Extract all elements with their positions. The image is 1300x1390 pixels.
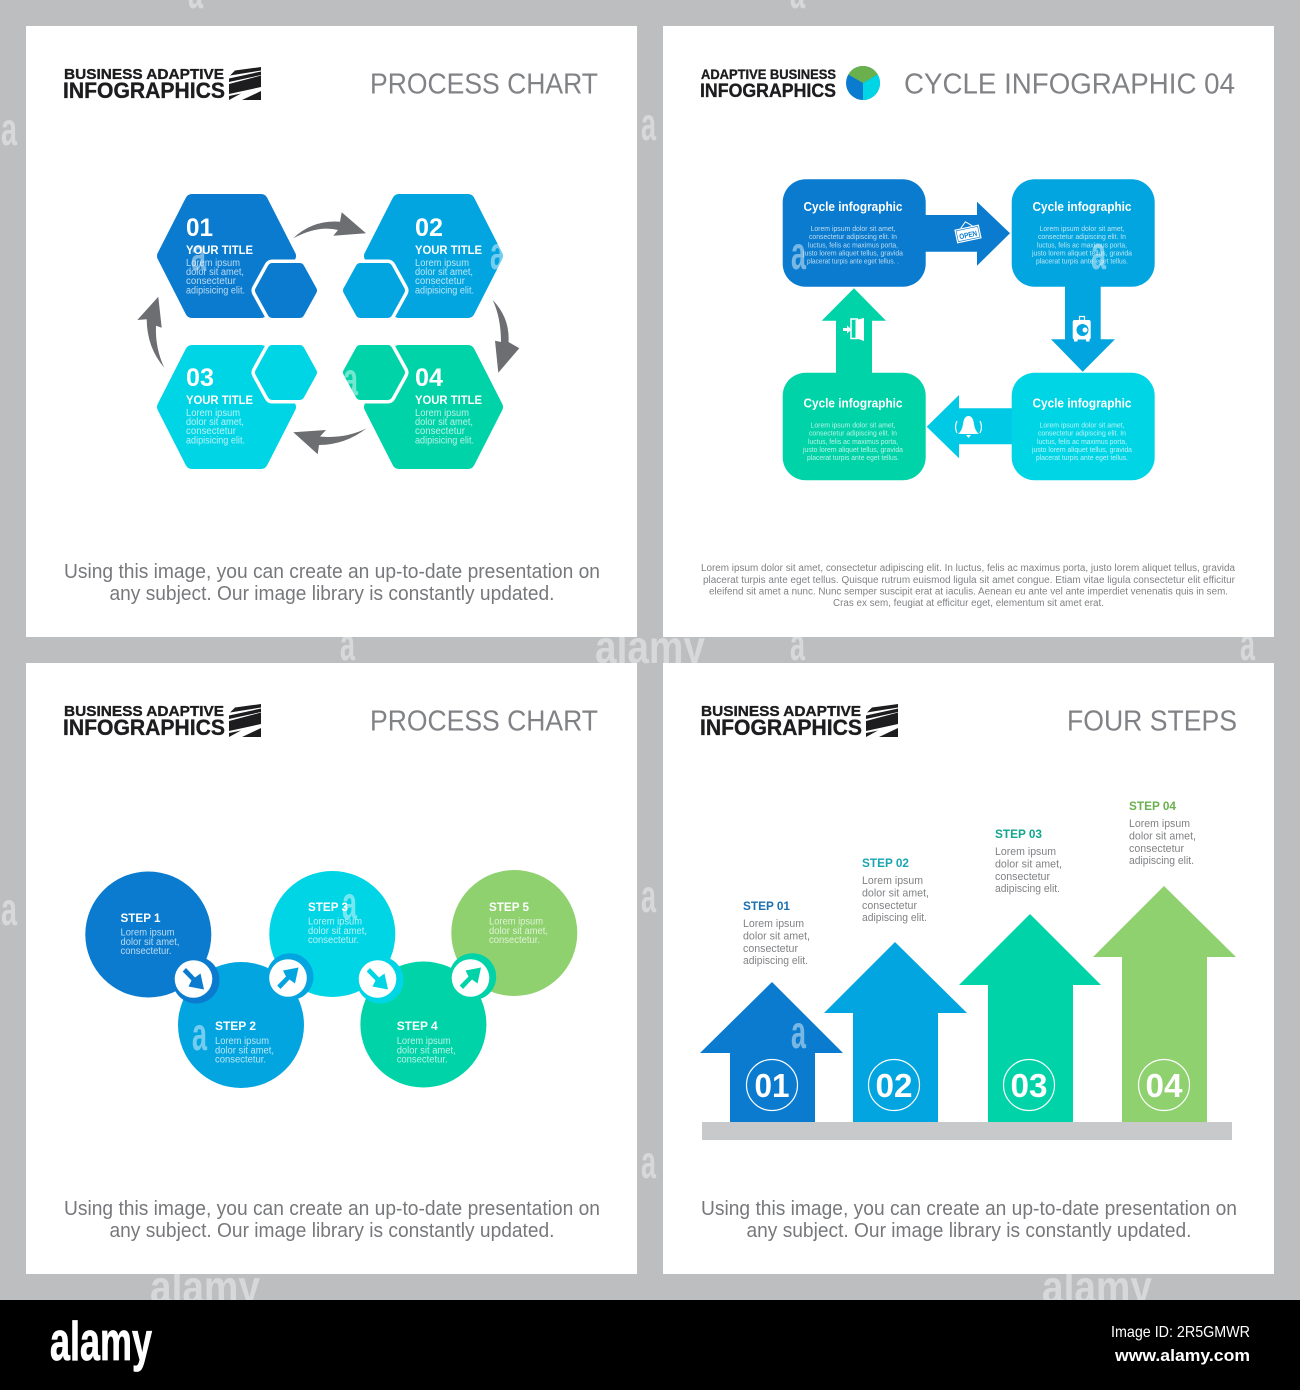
- description: [701, 1198, 1237, 1242]
- description: [701, 563, 1236, 609]
- panel: process chart hexagons: a: [191, 228, 206, 280]
- text: step 02: STEP 02: [862, 856, 909, 870]
- badge: arrow 3 to 4: [356, 956, 404, 1004]
- hexagon 04: YOUR TITLE: [415, 393, 482, 407]
- box: cycle 3: luctus, felis ac maximus porta,: [1037, 437, 1127, 446]
- circle: step 1: Lorem ipsum: [120, 928, 174, 938]
- text: step 04: STEP 04: [1129, 799, 1176, 813]
- hexagon 04: adipisicing elit.: [415, 436, 474, 446]
- text: alamy: [150, 1261, 260, 1313]
- hexagon 03: dolor sit amet,: [186, 417, 244, 428]
- logo: business adaptive infographics: [63, 66, 261, 103]
- panel: four steps: [663, 663, 1274, 1274]
- icon: pie circle: [846, 66, 880, 100]
- hexagon 04: dolor sit amet,: [415, 417, 473, 428]
- description: Using this image, you can create an up-to-date presentation on: [701, 1198, 1237, 1220]
- box: cycle 1: Cycle infographic: [804, 200, 903, 214]
- description: Using this image, you can create an up-to-date presentation on: [64, 1198, 600, 1220]
- hexagon 02: 02: [415, 214, 443, 242]
- logo: adaptive business infographics: INFOGRAPHICS: [700, 81, 836, 102]
- hexagon 01: consectetur: [186, 276, 237, 287]
- hexagon 04: [348, 350, 496, 462]
- box: cycle 2: consectetur adipiscing elit. In: [1038, 232, 1126, 241]
- text: step 02: adipiscing elit.: [862, 912, 927, 924]
- hexagon 02: consectetur: [415, 276, 466, 287]
- circle: step 1: [85, 872, 211, 998]
- footer bar: [0, 1300, 1300, 1390]
- box: cycle 1: consectetur adipiscing elit. In: [809, 232, 897, 241]
- text: step 04: Lorem ipsum: [1129, 818, 1190, 830]
- hexagon 03: 03: [186, 364, 214, 392]
- description: any subject. Our image library is constantly updated.: [110, 1220, 554, 1242]
- circle: step 3: dolor sit amet,: [308, 926, 367, 937]
- panel: process chart hexagons: [26, 26, 637, 637]
- box: cycle 1: Lorem ipsum dolor sit amet,: [810, 224, 896, 233]
- box: cycle 2: Lorem ipsum dolor sit amet,: [1040, 224, 1124, 233]
- hexagon 01: Lorem ipsum: [186, 258, 240, 269]
- box: cycle 4: luctus, felis ac maximus porta,: [808, 437, 898, 446]
- arrow: step 01: 01: [754, 1067, 790, 1104]
- text: a: [1, 103, 17, 155]
- circle: step 2: STEP 2: [215, 1019, 256, 1033]
- circle: step 3: Lorem ipsum: [308, 916, 362, 928]
- footer logo: alamy: [50, 1310, 152, 1372]
- logo: adaptive business infographics: ADAPTIVE BUSINESS: [701, 66, 836, 82]
- box: cycle 4: Cycle infographic: [804, 397, 903, 411]
- logo: business adaptive infographics: [63, 703, 261, 740]
- panel: cycle infographic 04: a: [1091, 227, 1106, 279]
- text: step 03: dolor sit amet,: [995, 858, 1062, 870]
- text: step 01: dolor sit amet,: [743, 930, 810, 942]
- box: cycle 3: Lorem ipsum dolor sit amet,: [1040, 421, 1124, 430]
- text: step 04: dolor sit amet,: [1129, 830, 1196, 842]
- arrow: 01 to 02: [293, 212, 366, 238]
- hexagon 02: adipisicing elit.: [415, 286, 474, 296]
- logo: business adaptive infographics: INFOGRAPHICS: [63, 715, 225, 740]
- arrow: 02 to 04: [493, 300, 519, 373]
- panel: four steps: a: [791, 1006, 806, 1058]
- box: cycle 2: [1012, 179, 1155, 287]
- hexagon 02: YOUR TITLE: [415, 243, 482, 257]
- arrow right with open sign: [924, 202, 1010, 266]
- text: step 03: Lorem ipsum: [995, 846, 1056, 858]
- text: step 03: STEP 03: [995, 827, 1042, 841]
- panel: process chart hexagons: a: [490, 227, 505, 279]
- box: cycle 4: justo lorem aliquet tellus, gravida: [802, 445, 904, 454]
- text: step 02: [862, 856, 929, 924]
- text: a: [1240, 618, 1255, 670]
- logo: business adaptive infographics: INFOGRAPHICS: [63, 78, 225, 103]
- circle: step 2: Lorem ipsum: [215, 1036, 269, 1047]
- box: cycle 3: placerat turpis ante eget tellus.: [1036, 453, 1128, 462]
- box: cycle 4: placerat turpis ante eget tellus.: [807, 453, 899, 462]
- circle: step 2: [178, 962, 304, 1088]
- circle: step 1: STEP 1: [120, 911, 161, 925]
- text: step 02: consectetur: [862, 900, 917, 912]
- text: a: [641, 870, 656, 922]
- box: cycle 4: Lorem ipsum dolor sit amet,: [810, 421, 896, 430]
- hexagon 02: [348, 201, 496, 313]
- arrow: step 03: 03: [1010, 1067, 1048, 1104]
- text: step 01: consectetur: [743, 943, 798, 955]
- heading: FOUR STEPS: [1067, 706, 1237, 738]
- hexagon 03: consectetur: [186, 426, 237, 437]
- circle: step 5: STEP 5: [489, 900, 529, 914]
- circle: step 5: Lorem ipsum: [489, 916, 543, 928]
- arrow: 04 to 03: [293, 428, 367, 454]
- description: [64, 561, 600, 605]
- text: step 01: [743, 899, 810, 967]
- text: step 04: adipiscing elit.: [1129, 855, 1194, 867]
- arrow: step 04: [1093, 886, 1236, 1122]
- circle: step 4: [360, 962, 486, 1088]
- text: a: [340, 618, 355, 670]
- text: step 02: Lorem ipsum: [862, 875, 923, 887]
- panel: cycle infographic 04: a: [791, 227, 806, 279]
- box: cycle 2: luctus, felis ac maximus porta,: [1037, 240, 1127, 250]
- text: step 02: dolor sit amet,: [862, 888, 929, 900]
- arrow: step 04: 04: [1146, 1067, 1183, 1104]
- box: cycle 3: justo lorem aliquet tellus, gravida: [1031, 445, 1133, 454]
- box: cycle 1: placerat turpis ante eget tellus. .: [807, 256, 899, 266]
- hexagon 03: YOUR TITLE: [186, 393, 253, 407]
- text: alamy: [595, 621, 705, 673]
- box: cycle 2: placerat turpis ante eget tellus.: [1036, 256, 1128, 266]
- text: step 04: [1129, 799, 1196, 867]
- circle: step 1: dolor sit amet,: [120, 937, 180, 948]
- arrow: step 02: [824, 942, 967, 1122]
- logo: business adaptive infographics: BUSINESS ADAPTIVE: [64, 703, 224, 720]
- text: step 03: consectetur: [995, 871, 1050, 883]
- logo: business adaptive infographics: BUSINESS ADAPTIVE: [64, 66, 224, 83]
- hexagon 02: Lorem ipsum: [415, 258, 469, 269]
- arrow down with safe icon: [1051, 285, 1115, 372]
- baseline bar: [702, 1122, 1232, 1140]
- hexagon 03: adipisicing elit.: [186, 436, 245, 446]
- text: step 03: adipiscing elit.: [995, 883, 1060, 895]
- text: a: [1, 883, 17, 935]
- description: placerat turpis ante eget tellus. Quisque rutrum euismod ligula sit amet congue. Etiam vitae ligula consectetur elit efficitur: [703, 575, 1236, 586]
- description: Using this image, you can create an up-to-date presentation on: [64, 561, 600, 583]
- box: cycle 3: consectetur adipiscing elit. In: [1038, 429, 1126, 438]
- badge: arrow 4 to 5: [449, 953, 496, 1000]
- box: cycle 2: Cycle infographic: [1032, 200, 1132, 214]
- box: cycle 2: justo lorem aliquet tellus, gravida: [1031, 248, 1133, 258]
- panel: process chart circles: a: [192, 1008, 207, 1060]
- hexagon 01: adipisicing elit.: [186, 286, 245, 296]
- circle: step 4: dolor sit amet,: [397, 1046, 456, 1056]
- circle: step 5: [451, 870, 577, 996]
- hexagon 01: 01: [186, 214, 213, 242]
- hexagon 01: YOUR TITLE: [186, 243, 253, 257]
- heading: PROCESS CHART: [370, 706, 598, 738]
- heading: CYCLE INFOGRAPHIC 04: [904, 68, 1235, 100]
- hexagon 04: consectetur: [415, 426, 466, 437]
- arrow: 03 to 01: [137, 297, 164, 368]
- text: step 01: adipiscing elit.: [743, 955, 808, 967]
- website: www.alamy.com: [1114, 1346, 1250, 1365]
- description: Lorem ipsum dolor sit amet, consectetur adipiscing elit. In luctus, felis ac maximus porta, justo lorem aliquet tellus, gravida: [701, 563, 1235, 574]
- circle: step 2: consectetur.: [215, 1054, 266, 1066]
- panel: process chart hexagons: a: [343, 353, 358, 405]
- circle: step 2: dolor sit amet,: [215, 1046, 274, 1056]
- circle: step 4: STEP 4: [397, 1019, 438, 1033]
- arrow right with open sign: OPEN: [958, 229, 978, 241]
- hexagon 04: 04: [415, 364, 443, 392]
- text: step 01: STEP 01: [743, 899, 790, 913]
- panel: process chart circles: a: [342, 877, 357, 929]
- text: step 04: consectetur: [1129, 843, 1184, 855]
- badge: arrow 1 to 2: [172, 956, 220, 1004]
- arrow: step 02: 02: [876, 1067, 912, 1104]
- logo: business adaptive infographics: BUSINESS ADAPTIVE: [701, 703, 861, 720]
- badge: arrow 2 to 3: [266, 953, 314, 1000]
- box: cycle 3: [1012, 373, 1155, 480]
- box: cycle 1: luctus, felis ac maximus porta,: [808, 240, 898, 250]
- text: alamy: [1042, 1261, 1152, 1313]
- arrow: step 01: [700, 982, 843, 1122]
- text: step 03: [995, 827, 1062, 895]
- arrow: step 03: [959, 914, 1101, 1122]
- circle: step 4: consectetur.: [397, 1054, 448, 1066]
- circle: step 3: [269, 871, 395, 997]
- hexagon 03: Lorem ipsum: [186, 408, 240, 419]
- image id: Image ID: 2R5GMWR: [1111, 1324, 1250, 1341]
- heading: PROCESS CHART: [370, 68, 598, 100]
- text: step 01: Lorem ipsum: [743, 918, 804, 930]
- text: a: [790, 618, 805, 670]
- text: a: [641, 1136, 656, 1188]
- logo: business adaptive infographics: [700, 703, 898, 740]
- hexagon 02: dolor sit amet,: [415, 267, 473, 278]
- box: cycle 1: [783, 179, 926, 287]
- arrow left with bell icon: [927, 395, 1013, 458]
- circle: step 5: dolor sit amet,: [489, 926, 548, 937]
- circle: step 3: consectetur.: [308, 935, 359, 946]
- description: Cras ex sem, feugiat at efficitur eget, elementum sit amet erat.: [833, 598, 1104, 609]
- logo: business adaptive infographics: INFOGRAPHICS: [700, 715, 862, 740]
- panel: cycle infographic 04: [663, 26, 1274, 637]
- box: cycle 1: justo lorem aliquet tellus, gravida: [802, 248, 904, 258]
- hexagon 04: Lorem ipsum: [415, 408, 469, 419]
- text: a: [641, 98, 656, 150]
- box: cycle 4: [783, 373, 926, 480]
- description: [64, 1198, 600, 1242]
- circle: step 4: Lorem ipsum: [397, 1036, 451, 1047]
- box: cycle 3: Cycle infographic: [1032, 397, 1132, 411]
- circle: step 3: STEP 3: [308, 900, 348, 914]
- description: any subject. Our image library is constantly updated.: [746, 1220, 1192, 1242]
- panel: process chart circles: [26, 663, 637, 1274]
- hexagon 01: dolor sit amet,: [186, 267, 244, 278]
- box: cycle 4: consectetur adipiscing elit. In: [809, 429, 897, 438]
- logo: adaptive business infographics: [700, 66, 880, 102]
- arrow up with door icon: [822, 288, 886, 374]
- description: eleifend sit amet a nunc. Nunc semper suscipit erat at iaculis. Aenean eu ante vel ante imperdiet venenatis quis in sem.: [709, 586, 1228, 598]
- circle: step 1: consectetur.: [120, 946, 172, 957]
- hexagon 03: [164, 350, 312, 462]
- description: any subject. Our image library is constantly updated.: [110, 583, 554, 605]
- circle: step 5: consectetur.: [489, 935, 540, 946]
- hexagon 01: [164, 201, 312, 313]
